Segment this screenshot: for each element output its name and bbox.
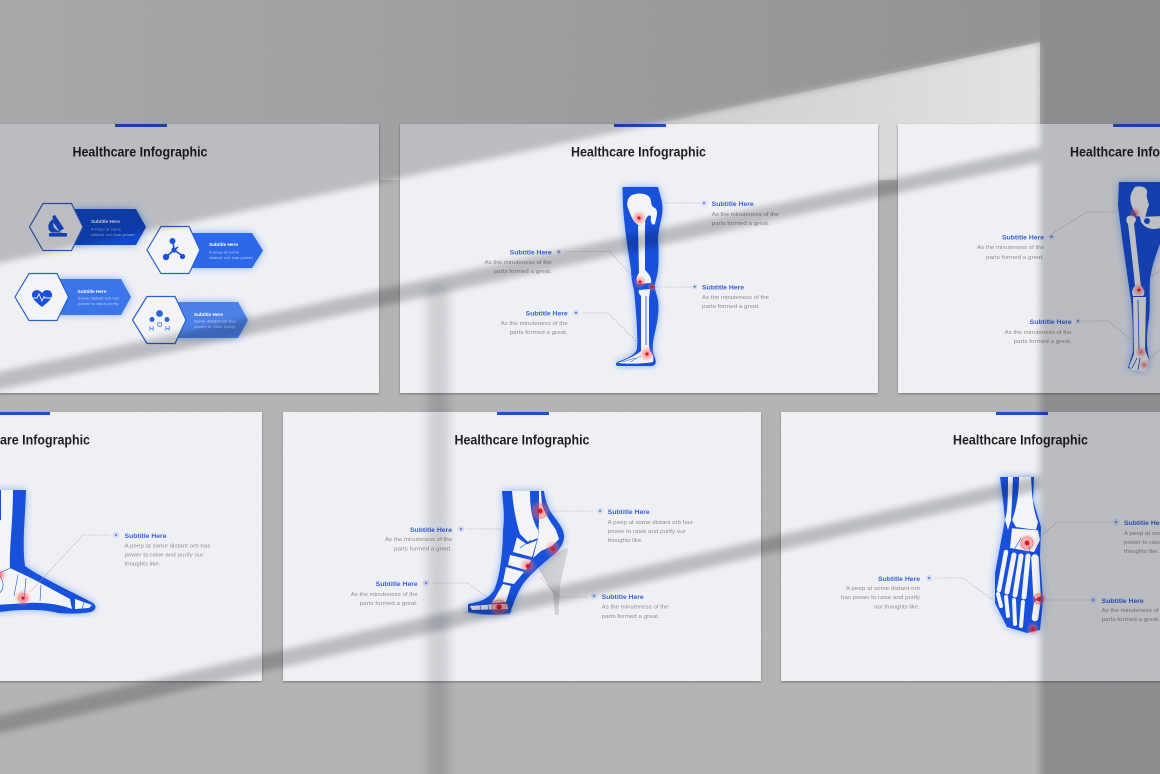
leg illustration (1118, 182, 1160, 372)
icon: molecule (163, 238, 185, 260)
hexagon card: heartbeat: Some distant orb has (78, 296, 120, 300)
callout: foot (113, 532, 211, 568)
callout: upper left: As the minuteness of the (977, 245, 1044, 251)
title: Healthcare Infographic (953, 432, 1088, 448)
callout: lower left: parts formed a great. (360, 601, 418, 607)
callout leaders (935, 522, 1113, 600)
callout: lower right: As the minuteness of the (1102, 608, 1160, 614)
slide 5: foot in high heel (283, 412, 761, 682)
high heel shoe (464, 548, 568, 615)
callout: upper right: Subtitle Here (712, 201, 754, 208)
foot illustration (0, 490, 95, 614)
callout: lower left: As the minuteness of the (351, 592, 418, 598)
hexagon card: molecule: Subtitle Here (209, 242, 239, 247)
icon: H2O: O (157, 322, 163, 329)
callout: upper left: As the minuteness of the (385, 537, 452, 543)
callout: lower left: Subtitle Here (1030, 319, 1072, 326)
hexagon card: microscope: distant orb has power (91, 232, 136, 237)
hexagon card: microscope: A Peep at some (91, 226, 121, 232)
hexagon card: microscope (30, 204, 146, 250)
callout: upper right: A peep at some distant orb has (608, 520, 693, 526)
icon: H2O (149, 310, 170, 333)
callout: lower right: Subtitle Here (1102, 598, 1144, 605)
callout: lower left (351, 580, 429, 607)
callout: lower right: As the minuteness of the (602, 604, 669, 610)
slide 3: leg front view (898, 124, 1160, 394)
hexagon card: molecule: A peep at some (209, 250, 239, 254)
callout: upper left: Subtitle Here (1002, 234, 1044, 242)
callout: foot: thoughts like. (124, 562, 160, 568)
hexagon card: water molecule (132, 296, 248, 344)
callout: lower right: parts formed a great. (702, 304, 760, 310)
callout: lower right (692, 284, 769, 310)
callout: lower right: Subtitle Here (602, 594, 644, 601)
hexagon card: water molecule: Some distant orb has (194, 318, 236, 324)
callout: upper left: parts formed a great. (394, 546, 452, 552)
callout: upper right (597, 508, 693, 544)
pain markers (631, 210, 657, 362)
slide 4: foot side view (0, 412, 262, 682)
callout: upper right (1113, 519, 1160, 555)
pain marker (14, 589, 32, 607)
hexagon card: heartbeat: power to raise purify (78, 301, 119, 306)
callout leaders (565, 203, 700, 343)
callout: upper left (485, 249, 562, 275)
callout: lower right: parts formed a great. (1102, 617, 1160, 623)
callout: upper left (977, 234, 1054, 261)
callout: left: Subtitle Here (878, 576, 920, 583)
callout: left: our thoughts like. (874, 604, 920, 610)
callout: upper left: Subtitle Here (410, 527, 452, 534)
callout: lower right: parts formed a great. (602, 614, 660, 620)
callout: left (841, 575, 932, 610)
callout: foot: Subtitle Here (124, 533, 167, 540)
callout: upper right: thoughts like. (1124, 549, 1159, 555)
callout: upper right (701, 200, 779, 227)
hexagon card: molecule (147, 226, 263, 274)
callout: left: A peep at some distant orb (846, 586, 920, 592)
hexagon card: microscope: Subtitle Here (91, 219, 121, 224)
callout: upper left: Subtitle Here (510, 250, 552, 256)
pain marker cut at edge (0, 568, 7, 582)
icon: H2O: H (165, 326, 170, 333)
callout: foot: power to raise and purify our (124, 552, 204, 558)
icon: microscope (48, 215, 67, 237)
title: Healthcare Infographic (571, 144, 706, 160)
callout: upper left (385, 526, 464, 552)
callout: upper right: power to raise and purify our (608, 529, 686, 535)
callout leaders (433, 511, 593, 597)
callout: upper left: parts formed a great. (494, 269, 552, 275)
hexagon card: heartbeat: Subtitle Here (78, 289, 107, 294)
hexagon card: water molecule: power to raise purify (194, 324, 235, 329)
hexagon card: water molecule: Subtitle Here (194, 312, 224, 317)
callout: lower left: As the minuteness of the (1005, 330, 1072, 336)
callout: upper left: As the minuteness of the (485, 260, 552, 266)
callout: foot: A peep at some distant orb has (124, 544, 211, 550)
hexagon card: heartbeat (15, 274, 131, 320)
slide 1: hexagon infographic (0, 124, 379, 394)
callout: upper right: parts formed a great. (712, 221, 770, 227)
callout: lower left: parts formed a great. (1014, 339, 1072, 345)
slide 2: leg side view (400, 124, 878, 394)
callout: left: has power to raise and purify (841, 595, 920, 601)
title: Healthcare Infographic (454, 432, 590, 448)
leg illustration (616, 187, 663, 366)
icon: heart (31, 290, 53, 307)
callout: lower right: As the minuteness of the (702, 295, 769, 301)
callout: upper right: As the minuteness of the (712, 212, 779, 218)
callout: lower left (501, 310, 579, 336)
pain markers (1017, 533, 1047, 636)
pain markers (1129, 207, 1149, 370)
window mullion shadow (427, 286, 449, 774)
callout: lower right: Subtitle Here (702, 284, 744, 292)
callout: lower right (1090, 597, 1160, 623)
callout leaders (1053, 212, 1160, 362)
callout: upper right: Subtitle Here (608, 509, 650, 516)
callout: upper right: thoughts like. (608, 538, 643, 544)
callout: lower left: parts formed a great. (510, 330, 568, 336)
callout: lower left: Subtitle Here (376, 581, 418, 588)
icon: H2O: H (149, 326, 154, 333)
foot skeleton illustration (995, 477, 1043, 633)
callout: lower left: As the minuteness of the (501, 321, 568, 327)
callout leader (30, 535, 110, 592)
hexagon card: molecule: distant orb has power (209, 255, 254, 260)
callout: lower left: Subtitle Here (526, 310, 568, 318)
slide 6: foot top view (781, 412, 1160, 682)
foot illustration (468, 491, 564, 615)
callout: lower right (591, 593, 669, 620)
callout: upper left: parts formed a great. (986, 255, 1044, 261)
title: Healthcare Infographic (72, 144, 208, 160)
callout: lower left (1005, 318, 1081, 345)
pain markers (488, 500, 562, 618)
